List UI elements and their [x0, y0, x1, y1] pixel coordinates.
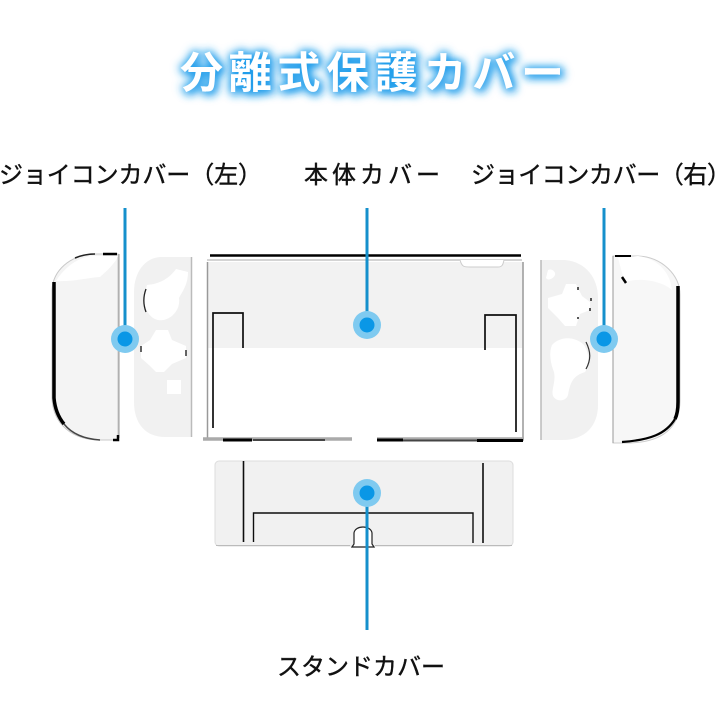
title: 分離式保護カバー	[183, 53, 567, 101]
left button plate	[134, 257, 192, 437]
callout: body	[353, 208, 381, 339]
label: stand cover: スタンドカバー	[277, 654, 445, 681]
right button plate	[541, 260, 598, 440]
title: 分離式保護カバー	[180, 50, 564, 98]
label: left joy-con cover: ジョイコンカバー（左）	[0, 162, 262, 189]
callout: stand	[353, 479, 381, 630]
callout: left joy-con	[111, 208, 139, 353]
label: body cover: 本体カバー	[304, 162, 440, 189]
title: 分離式保護カバー	[180, 50, 564, 98]
right joy-con shell	[613, 256, 680, 443]
stand cover	[215, 461, 513, 547]
main body cover	[203, 256, 524, 440]
callout: right joy-con	[590, 208, 618, 353]
left joy-con shell	[52, 254, 119, 440]
